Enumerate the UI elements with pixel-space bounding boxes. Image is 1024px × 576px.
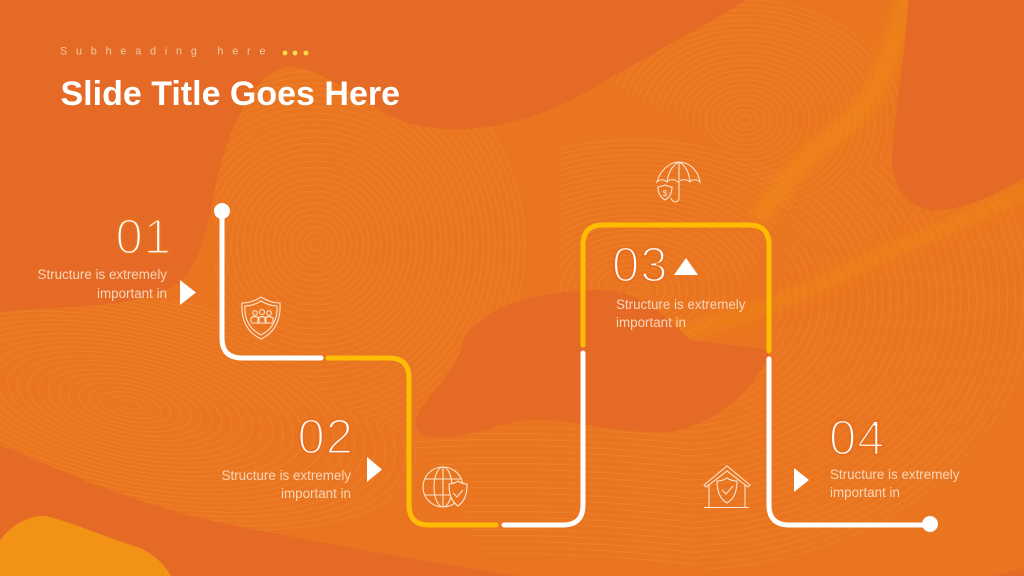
subheading: Subheading here [60,46,274,58]
step 02 [222,410,382,501]
icon: shield with people [242,297,280,339]
step 04: important in [830,485,900,500]
step 04 [794,412,960,500]
icon dollar sign: $ [663,189,668,198]
step 04: Structure is extremely [830,467,960,482]
title: Slide Title Goes Here [60,75,400,113]
step 03: 03 [612,238,669,292]
step 01: important in [97,286,167,301]
step 02: 02 [297,410,354,464]
step 03 [612,238,746,330]
step 01 [38,210,196,305]
icon: umbrella with dollar shield [657,162,700,202]
step 04: 04 [829,412,886,466]
step 03: Structure is extremely [616,297,746,312]
icon: globe with shield [423,467,467,507]
step 01: 01 [115,210,172,264]
icon: house with shield [704,466,750,508]
step 02: Structure is extremely [222,468,351,483]
step 01: Structure is extremely [38,267,167,282]
step 03: important in [616,315,686,330]
step 02: important in [281,486,351,501]
stepped path line [214,203,938,532]
